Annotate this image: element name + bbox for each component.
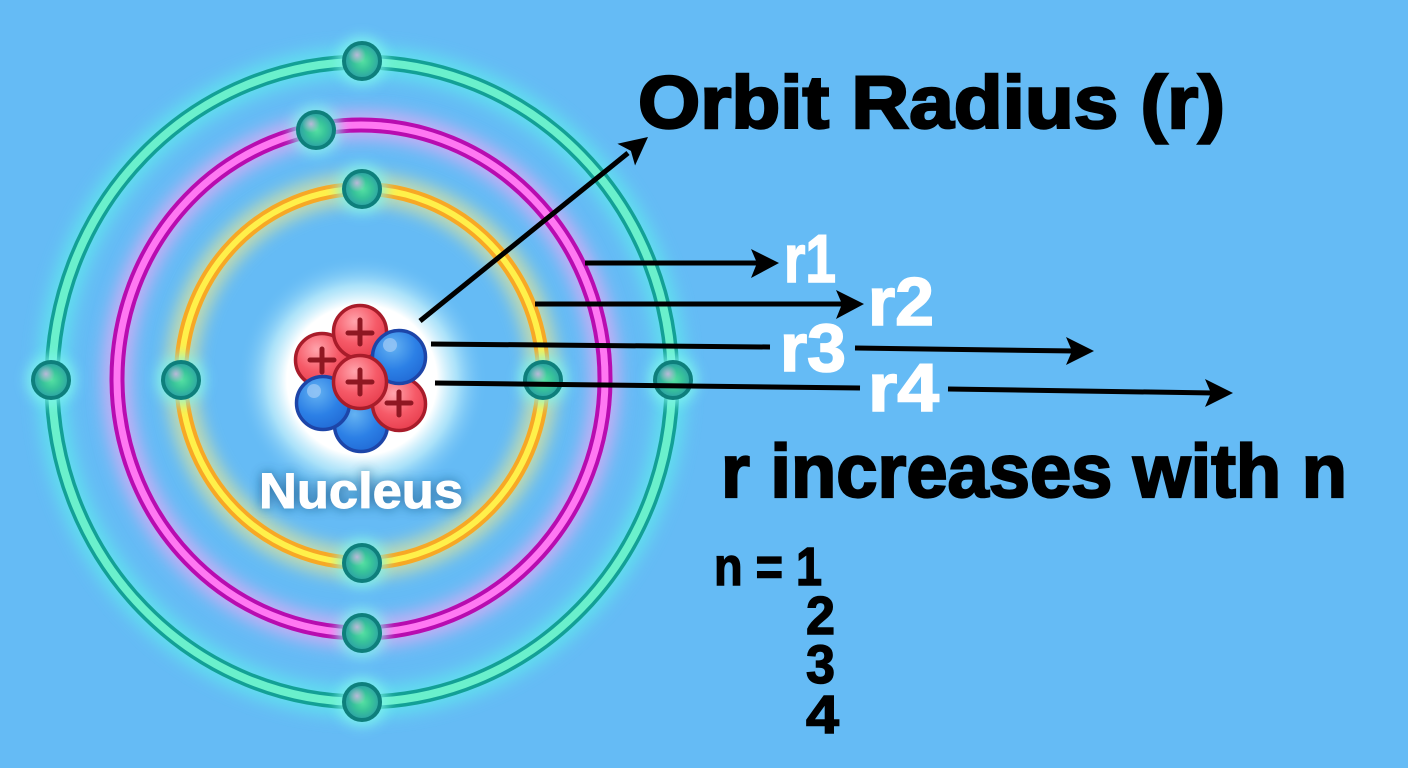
proton: center (334, 356, 386, 408)
electron: middle upper left (298, 112, 334, 148)
n value 3: 3 (806, 635, 835, 695)
electrons (26, 36, 698, 727)
arrow: r2 (535, 290, 864, 319)
arrow: r1 (585, 249, 779, 278)
electron: inner bottom (344, 545, 380, 581)
electron: inner left (163, 362, 199, 398)
statement: r increases with n: r increases with n (721, 429, 1347, 513)
proton: left (296, 334, 348, 386)
electron: outer bottom (344, 684, 380, 720)
nucleus glow (237, 255, 487, 505)
electron: outer right (655, 362, 691, 398)
n value 4: 4 (806, 685, 839, 745)
middle orbit (magenta) (117, 125, 605, 633)
neutron: left (296, 376, 350, 430)
n equals 1: n = 1 (714, 537, 822, 597)
n value 2: 2 (806, 586, 835, 646)
nucleus label: Nucleus (259, 463, 463, 519)
outer orbit (teal) (52, 62, 672, 702)
proton: lower right (372, 378, 426, 430)
label: r4: r4 (868, 350, 939, 426)
neutron: upper right (372, 330, 426, 384)
label: r3: r3 (780, 310, 846, 386)
proton: top (334, 306, 386, 358)
arrow: r3 (431, 337, 1094, 365)
arrow: r4 (435, 379, 1233, 407)
n values list (714, 537, 839, 745)
inner orbit (yellow) (181, 189, 543, 563)
arrow: to orbit radius title (420, 126, 657, 321)
electron: inner top (344, 171, 380, 207)
electron: outer left (33, 362, 69, 398)
electron: middle bottom (344, 615, 380, 651)
label: r1: r1 (784, 221, 836, 297)
electron: inner right (525, 362, 561, 398)
nucleus particles (296, 306, 426, 452)
neutron: bottom (334, 398, 388, 452)
nucleus label: Nucleus (259, 463, 463, 519)
title: Orbit Radius (r) (638, 61, 1225, 144)
label: r2: r2 (868, 264, 934, 340)
electron: outer top (344, 43, 380, 79)
